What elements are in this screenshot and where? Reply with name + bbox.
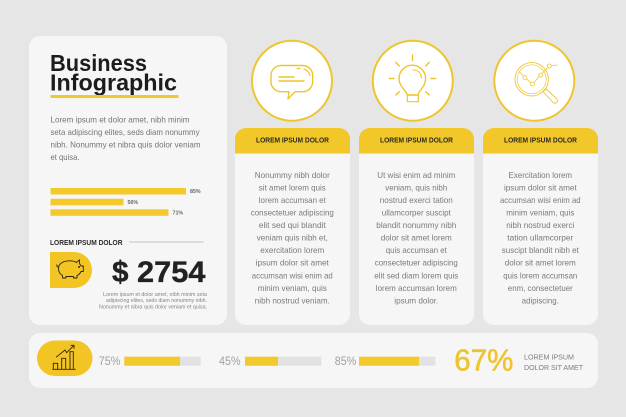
card 1 text: ipsum dolor sit amet xyxy=(256,258,329,268)
icon: speech bubble xyxy=(252,41,332,121)
card 1 text xyxy=(251,170,334,305)
panel: bottom stats xyxy=(29,333,598,388)
icon: piggy bank xyxy=(50,252,92,288)
panel: card 3 xyxy=(483,128,598,325)
panel: card 3: LOREM IPSUM DOLOR xyxy=(504,137,577,144)
stat: 75%: 75% xyxy=(99,354,121,368)
card 3 text: suscipt blandit nibh et xyxy=(502,245,579,255)
panel: card 1: LOREM IPSUM DOLOR xyxy=(256,137,329,144)
card 1 header xyxy=(235,128,350,154)
bar chart: three percentages xyxy=(50,188,201,217)
card 1 text: Nonummy nibh dolor xyxy=(255,170,330,180)
card 2 text: dolor sit amet lorem xyxy=(381,233,452,243)
intro text: nibh. Nonummy et nibra quis dolor veniam xyxy=(50,140,201,150)
stat: 75% xyxy=(99,354,201,368)
card 1 text: accumsan wisi enim ad xyxy=(252,270,333,280)
amount caption: adipiscing elites, seds diam nonummy nibh. xyxy=(106,298,207,304)
title: Infographic xyxy=(50,70,177,96)
card 3 text: Exercitation lorem xyxy=(509,170,572,180)
stat caption xyxy=(524,352,583,372)
card 3 text xyxy=(500,170,581,305)
bar chart: three percentages: 56% xyxy=(128,200,138,206)
card 2 text: ullamcorper suscipt xyxy=(382,208,451,218)
stat caption: LOREM IPSUM xyxy=(524,352,574,362)
title xyxy=(50,50,177,96)
card 1 text: veniam quis nibh et, xyxy=(257,233,328,243)
card 2 text xyxy=(374,170,458,305)
big stat: 67%: 67% xyxy=(454,343,513,378)
icon: light bulb xyxy=(373,41,453,121)
bar chart: three percentages: 85% xyxy=(190,189,201,195)
savings heading: LOREM IPSUM DOLOR xyxy=(50,240,123,247)
title underline xyxy=(50,95,178,98)
card 1 text: minim veniam, quis xyxy=(258,283,327,293)
card 3 text: minim veniam, quis xyxy=(506,208,574,218)
panel: card 1 xyxy=(235,128,350,325)
card 1 text: lorem accumsan et xyxy=(259,195,326,205)
stat caption: DOLOR SIT AMET xyxy=(524,363,583,372)
amount: $ xyxy=(112,256,129,289)
card 2 header xyxy=(359,128,474,154)
title: Business xyxy=(50,50,147,76)
panel: intro and savings xyxy=(29,36,227,325)
card 2 text: ipsum dolor. xyxy=(394,295,438,305)
card 3 text: quis lorem accumsan xyxy=(503,270,578,280)
intro text: Lorem ipsum et dolor amet, nibh minim xyxy=(50,114,190,124)
card 1 text: exercitation lorem xyxy=(260,245,324,255)
amount caption xyxy=(99,292,207,310)
card 3 text: enm, consectetuer xyxy=(508,283,573,293)
icon: magnifier with line chart xyxy=(494,41,574,121)
card 3 text: tation ullamcorper xyxy=(507,233,574,243)
card 1 text: consectetuer adipiscing xyxy=(251,208,334,218)
amount caption: Lorem ipsum et dolor amet, nibh minim seta xyxy=(103,292,207,298)
amount caption: Nonummy et nibra quis dolor veniam et quisa. xyxy=(99,304,207,310)
card 2 text: Ut wisi enim ad minim xyxy=(377,170,455,180)
intro text: et quisa. xyxy=(50,152,80,162)
card 1 text: nibh nostrud veniam. xyxy=(255,295,330,305)
panel: card 2 xyxy=(359,128,474,325)
card 3 header xyxy=(483,128,598,154)
card 1 text: sit amet lorem quis xyxy=(259,182,326,192)
card 2 text: blandit nonummy nibh xyxy=(376,220,457,230)
card 3 text: nibh nostrud exerci xyxy=(506,220,574,230)
stat: 85% xyxy=(335,354,436,368)
panel: card 2: LOREM IPSUM DOLOR xyxy=(380,137,453,144)
card 1 text: elit sed qui blandit xyxy=(259,220,326,230)
stat: 45% xyxy=(219,354,321,368)
card 3 text: ipsum dolor sit amet xyxy=(504,182,577,192)
icon: rising bar chart xyxy=(37,340,92,376)
card 2 text: nostrud exerci tation xyxy=(380,195,453,205)
card 3 text: accumsan wisi enim ad xyxy=(500,195,581,205)
stat: 85%: 85% xyxy=(335,354,357,368)
intro text: seta adipiscing elites, seds diam nonummy xyxy=(50,127,200,137)
card 2 text: elit sed diam lorem quis xyxy=(374,270,458,280)
card 2 text: veniam, quis nibh xyxy=(385,182,448,192)
card 2 text: lorem accumsan lorem xyxy=(376,283,457,293)
bar chart: three percentages: 71% xyxy=(172,211,183,217)
stat: 45%: 45% xyxy=(219,354,241,368)
amount: 2754 xyxy=(137,256,206,289)
card 3 text: adipiscing. xyxy=(522,295,559,305)
card 2 text: quis accumsan et xyxy=(386,245,447,255)
intro text xyxy=(50,114,201,162)
card 3 text: dolor sit amet lorem xyxy=(505,258,576,268)
card 2 text: consectetuer adipiscing xyxy=(375,258,458,268)
